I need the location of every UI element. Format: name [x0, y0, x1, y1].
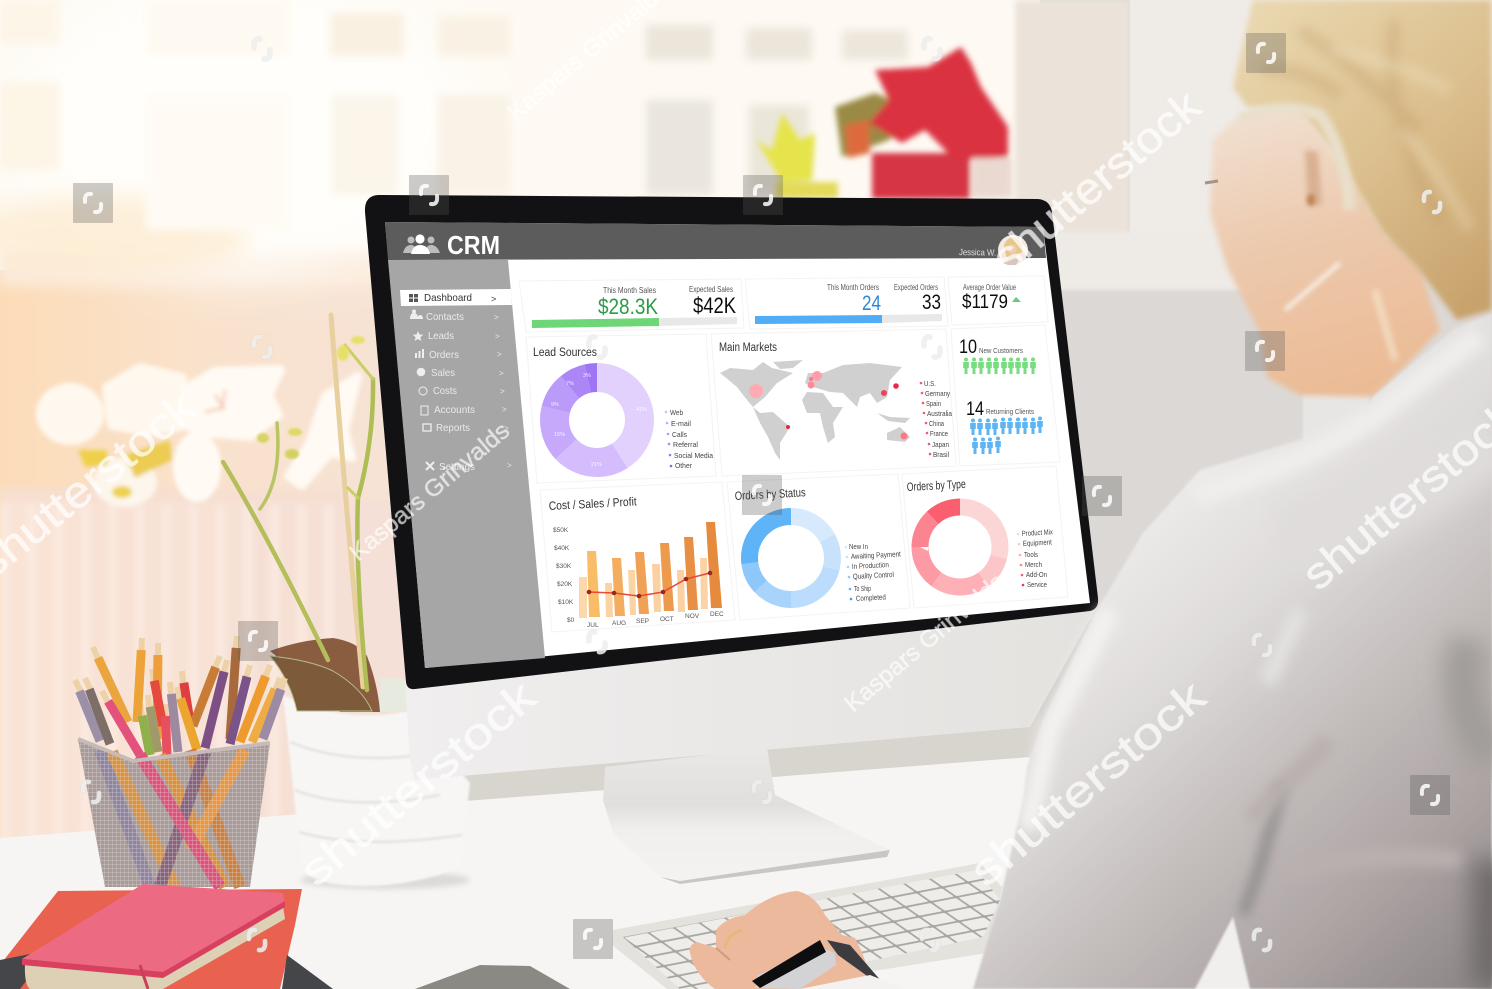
smart watch [752, 940, 882, 989]
sidebar menu: Contacts [426, 311, 464, 323]
orchid flowers [36, 368, 358, 507]
panel: lead sources: Lead Sources [533, 347, 597, 359]
right wall, curtain and sill [1000, 0, 1492, 780]
KPI: this month orders: Expected Orders [894, 283, 938, 292]
hand on keyboard [690, 891, 870, 989]
KPI: this month sales: $28.3K [598, 294, 658, 319]
orchid stems and support stick [223, 315, 373, 690]
chart axis labels: $40K [554, 545, 570, 552]
panel: lead sources: 7% [566, 381, 574, 387]
panel: returning clients [966, 399, 1043, 454]
wall behind monitor stand [410, 700, 1040, 805]
world map [720, 360, 910, 460]
panel: orders by status: Orders by Status [734, 485, 806, 503]
legend: lead sources [665, 408, 714, 470]
donut: lead sources [554, 378, 640, 462]
panel: returning clients: 14 [966, 399, 984, 420]
sidebar menu: Accounts [434, 404, 475, 416]
KPI: average order value: Average Order Value [963, 283, 1016, 292]
header logo: people icon [403, 234, 440, 254]
menu: active dashboard row [400, 289, 512, 306]
KPI: this month orders [755, 283, 942, 324]
panel: new customers [959, 337, 1036, 374]
panel: returning clients: Returning Clients [986, 409, 1034, 416]
shirt highlights and folds [1028, 335, 1492, 989]
watermarks: shutterstock [291, 671, 546, 896]
panel: orders by type: Orders by Type [906, 477, 966, 494]
legend: markets: U.S. [924, 379, 936, 388]
orchid buds [257, 336, 365, 459]
legend: lead sources: Calls [672, 430, 687, 439]
panel: lead sources: 41% [636, 407, 647, 413]
panel: cost sales profit [548, 494, 724, 629]
person: shirt [973, 313, 1492, 989]
mesh pencil holder [78, 739, 270, 887]
legend: order status: Completed [856, 592, 886, 603]
chart axis labels: $50K [553, 527, 569, 534]
chart axis labels: $10K [558, 599, 574, 606]
donut: orders by status [750, 516, 832, 600]
card outlines [519, 276, 1068, 632]
sidebar menu: > [499, 369, 504, 378]
sidebar menu [409, 292, 512, 473]
legend: markets: Germany [925, 389, 950, 398]
legend: markets: Japan [932, 440, 949, 449]
monitor chin [405, 605, 1098, 780]
watermarks: Kaspars Grinvalds [840, 568, 1010, 718]
white flower pot [283, 678, 470, 889]
monitor bezel [365, 195, 1098, 689]
legend: order type: Tools [1024, 550, 1038, 559]
user name: Jessica W. [959, 247, 996, 258]
legend: order type: Service [1027, 580, 1047, 589]
legend: markets: France [930, 429, 948, 438]
person: neck and face [1210, 110, 1440, 397]
panel: lead sources: 3% [583, 373, 591, 379]
legend: order type: Product Mix [1022, 527, 1053, 538]
background: wall below window [0, 270, 420, 870]
sidebar menu: > [494, 313, 499, 322]
legend: order type: Equipment [1023, 537, 1053, 548]
KPI: average order value: $1179 [962, 292, 1008, 313]
sidebar menu: > [502, 405, 507, 414]
legend: lead sources: Social Media [674, 451, 714, 460]
legend: markets [920, 379, 953, 459]
phone on desk [415, 965, 570, 989]
white wall gap below arm [1193, 917, 1250, 989]
profit line [587, 571, 712, 598]
panel: new customers: New Customers [979, 348, 1023, 355]
chart axis labels: OCT [660, 616, 674, 623]
sidebar menu: Orders [429, 349, 459, 361]
chart axis labels: DEC [710, 611, 724, 618]
panel: cost sales profit: Cost / Sales / Profit [548, 494, 638, 513]
sidebar menu: Settings [439, 461, 475, 473]
watermarks: shutterstock [983, 81, 1211, 283]
KPI: this month sales: $42K [693, 293, 736, 318]
red notebook stack [0, 884, 333, 989]
background plants on the windowsill [756, 47, 1012, 199]
screen white background [385, 222, 1090, 668]
user avatar [998, 235, 1028, 265]
plant leaves in pot [270, 638, 380, 712]
watermarks: shutterstock [961, 671, 1216, 896]
KPI: this month sales: This Month Sales [603, 286, 656, 295]
legend: lead sources: Other [675, 461, 692, 470]
chart axis labels: JUL [587, 622, 599, 629]
chart axis labels: $30K [556, 563, 572, 570]
panel: lead sources: 9% [551, 402, 559, 408]
sidebar menu: Reports [436, 422, 470, 434]
legend: lead sources: Web [670, 408, 683, 417]
watermarks: Kaspars Grinvalds [345, 417, 515, 567]
chart axis labels [553, 527, 724, 629]
panel: main markets [719, 342, 953, 460]
legend: order type: Add-On [1026, 570, 1047, 579]
sidebar menu: > [500, 387, 505, 396]
window panes [0, 0, 908, 230]
panel: lead sources: 21% [591, 462, 602, 468]
sidebar menu: Costs [433, 385, 457, 397]
sidebar menu: Dashboard [424, 292, 472, 304]
panel: lead sources: 15% [554, 432, 565, 438]
KPI: average order value [962, 283, 1021, 313]
panel: orders by status [734, 485, 902, 603]
legend: markets: Brasil [933, 450, 949, 459]
panel: main markets: Main Markets [719, 342, 777, 354]
pencil wood tips [75, 636, 285, 725]
chart axis labels: SEP [636, 618, 649, 625]
KPI: this month sales [532, 285, 737, 328]
sidebar menu: > [491, 294, 496, 304]
chart axis labels: $0 [567, 617, 575, 624]
legend: markets: Australia [927, 409, 953, 418]
sidebar menu: > [504, 424, 509, 433]
person: blonde hair [1233, 0, 1492, 320]
panel: new customers: 10 [959, 337, 977, 358]
icon rows: blue people [970, 416, 1043, 454]
sidebar menu: > [495, 332, 500, 341]
chart axis labels: AUG [612, 620, 626, 627]
legend: order type: Merch [1025, 560, 1042, 569]
panel: orders by type [906, 477, 1053, 589]
sidebar menu: > [497, 350, 502, 359]
legend: order status: Awaiting Payment [851, 549, 902, 561]
radiator [0, 487, 415, 852]
legend: markets: Spain [926, 399, 941, 408]
sleeve cuff at wrist [807, 975, 905, 989]
legend: order type [1017, 527, 1053, 589]
chart axis labels: $20K [557, 581, 573, 588]
bar chart [579, 522, 722, 618]
legend: order status: Quality Control [853, 570, 894, 581]
background: bright window [0, 0, 1040, 286]
keyboard [612, 863, 1002, 989]
legend: order status [845, 542, 902, 603]
legend: order status: New In [849, 542, 868, 551]
pencils [75, 636, 285, 755]
monitor stand [603, 748, 890, 884]
icon row: green people [963, 358, 1036, 374]
KPI: this month orders: 24 [862, 292, 881, 315]
chart axis labels: NOV [685, 613, 700, 620]
desk surface [0, 757, 1040, 989]
donut: orders by type [920, 507, 1000, 587]
legend: markets: China [929, 419, 945, 428]
legend: lead sources: E-mail [671, 419, 691, 428]
sidebar menu: Leads [428, 330, 454, 342]
KPI: this month sales: Expected Sales [689, 285, 733, 294]
legend: order status: To Ship [854, 584, 871, 593]
glasses earpiece [1205, 181, 1218, 183]
KPI: this month orders: This Month Orders [827, 283, 879, 292]
KPI: this month orders: 33 [922, 291, 941, 314]
screen [385, 222, 1090, 668]
legend: lead sources: Referral [673, 440, 698, 449]
header title: CRM [447, 230, 500, 260]
header bar [385, 222, 1046, 260]
legend: order status: In Production [852, 560, 889, 571]
map market bubbles [749, 371, 908, 440]
sidebar menu: > [507, 461, 512, 470]
sidebar menu: Sales [431, 367, 455, 379]
panel: lead sources [533, 347, 714, 470]
sidebar [388, 260, 545, 668]
